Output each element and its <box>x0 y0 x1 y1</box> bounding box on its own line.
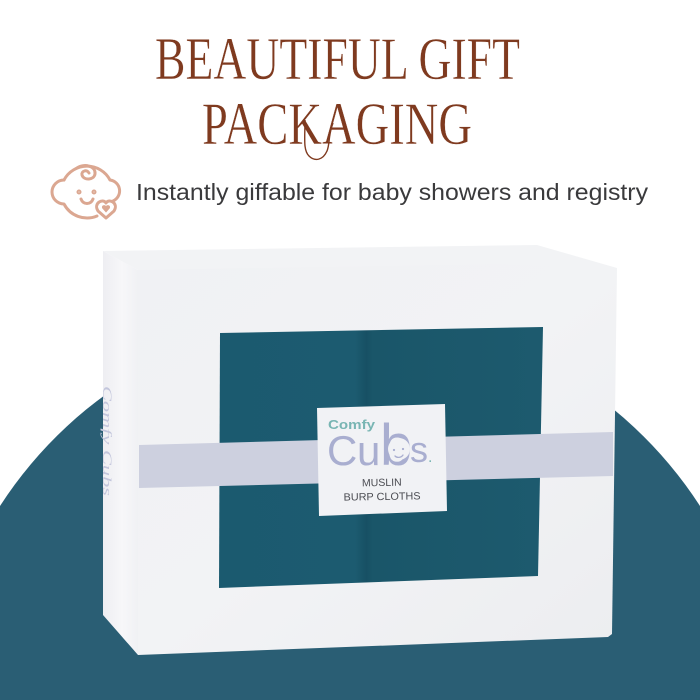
product name <box>343 476 421 504</box>
lavender band <box>139 432 613 488</box>
logo text: Cubs: C <box>327 427 357 474</box>
box outer shell <box>103 251 138 655</box>
logo text: Cubs <box>327 413 432 478</box>
gift box <box>100 245 617 655</box>
product name: BURP CLOTHS <box>343 490 421 504</box>
subtitle text: Instantly giffable for baby showers and registry <box>136 179 649 205</box>
title: BEAUTIFUL GIFT <box>155 26 520 92</box>
box top edge <box>103 245 617 270</box>
icon: baby face with heart <box>52 166 120 218</box>
title: PACKAGING <box>202 91 472 157</box>
logo text: Cubs: u <box>357 427 380 474</box>
product name: MUSLIN <box>362 477 402 489</box>
window with teal cloth <box>219 327 543 588</box>
logo face <box>394 448 404 457</box>
side logo: Comfy Cubs <box>100 386 115 496</box>
logo text: Cubs: . <box>428 449 432 466</box>
logo text: Cubs: s <box>410 429 428 470</box>
box front face <box>138 264 617 655</box>
title <box>155 26 520 159</box>
teal background circle <box>0 315 700 700</box>
logo text: Cubs: b <box>380 413 412 478</box>
product label <box>317 404 447 516</box>
logo text: Comfy: Comfy <box>328 417 376 432</box>
